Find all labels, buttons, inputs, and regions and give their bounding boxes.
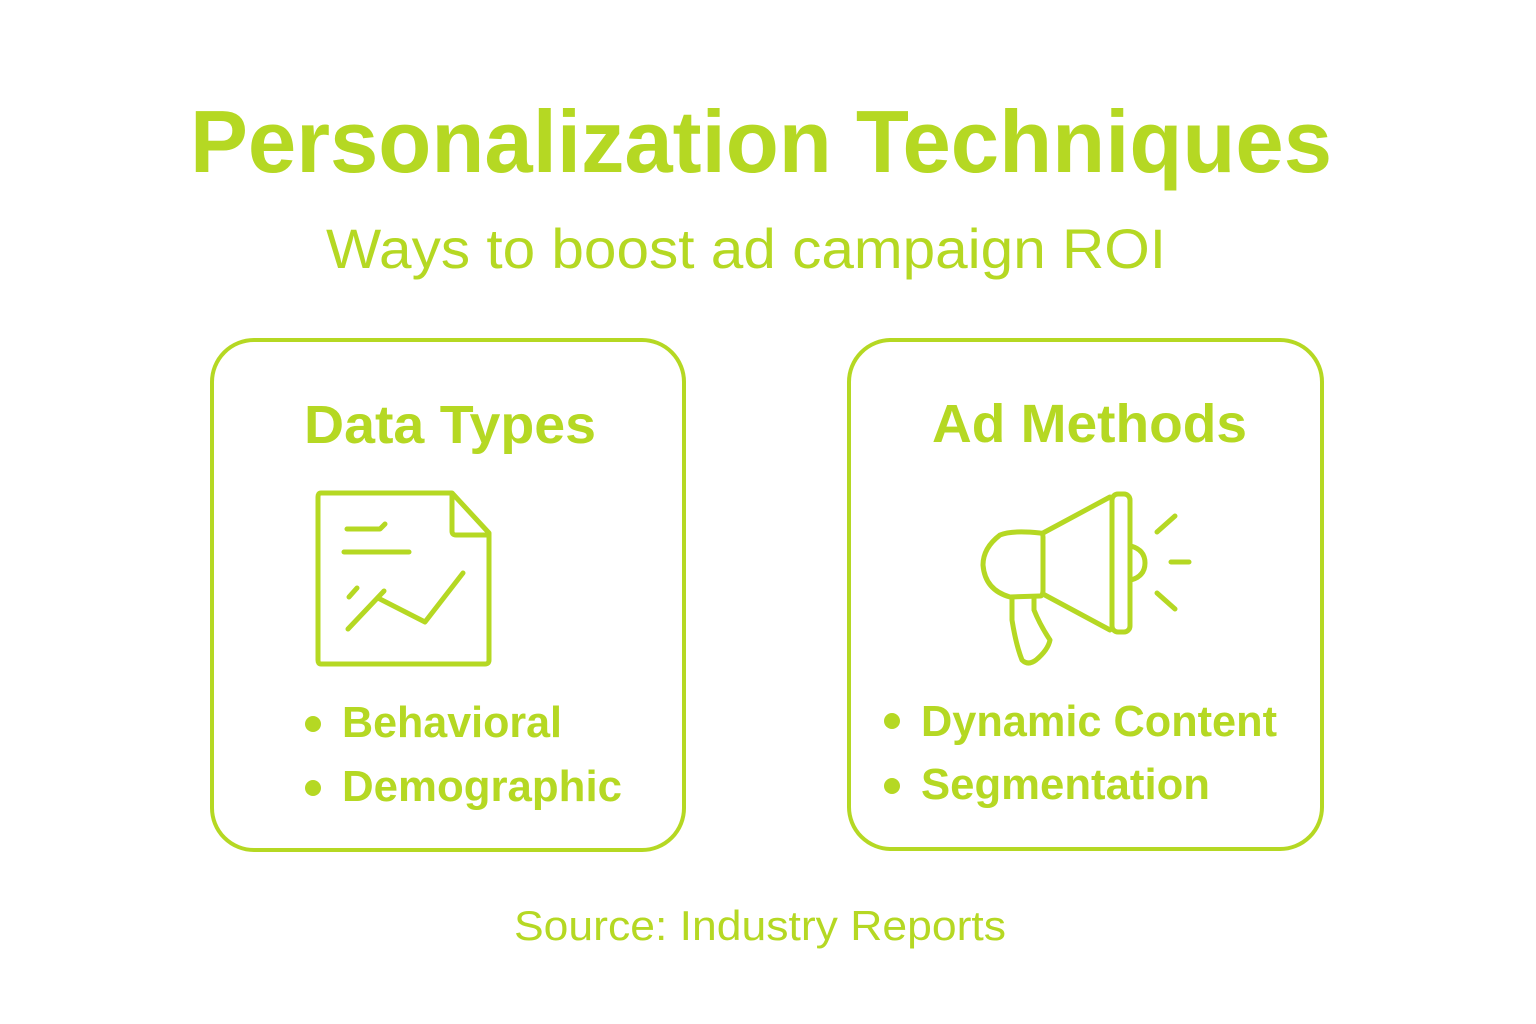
- bullet list: data types: Behavioral: [342, 698, 562, 747]
- bullet list: data types: [305, 698, 622, 811]
- subtitle: Ways to boost ad campaign ROI: [326, 217, 1166, 280]
- panel: data types: [212, 340, 684, 850]
- panel: ad methods: [849, 340, 1322, 849]
- bullet list: ad methods: Segmentation: [921, 760, 1210, 809]
- heading: ad methods: Ad Methods: [932, 394, 1247, 454]
- title: Personalization Techniques: [190, 92, 1332, 191]
- bullet list: ad methods: [884, 697, 1277, 809]
- icon: megaphone: [983, 494, 1189, 663]
- source note: Source: Industry Reports: [514, 902, 1006, 949]
- heading: data types: Data Types: [304, 395, 596, 455]
- bullet list: data types: Demographic: [342, 762, 622, 811]
- icon: document chart: [318, 493, 489, 664]
- bullet list: ad methods: Dynamic Content: [921, 697, 1277, 746]
